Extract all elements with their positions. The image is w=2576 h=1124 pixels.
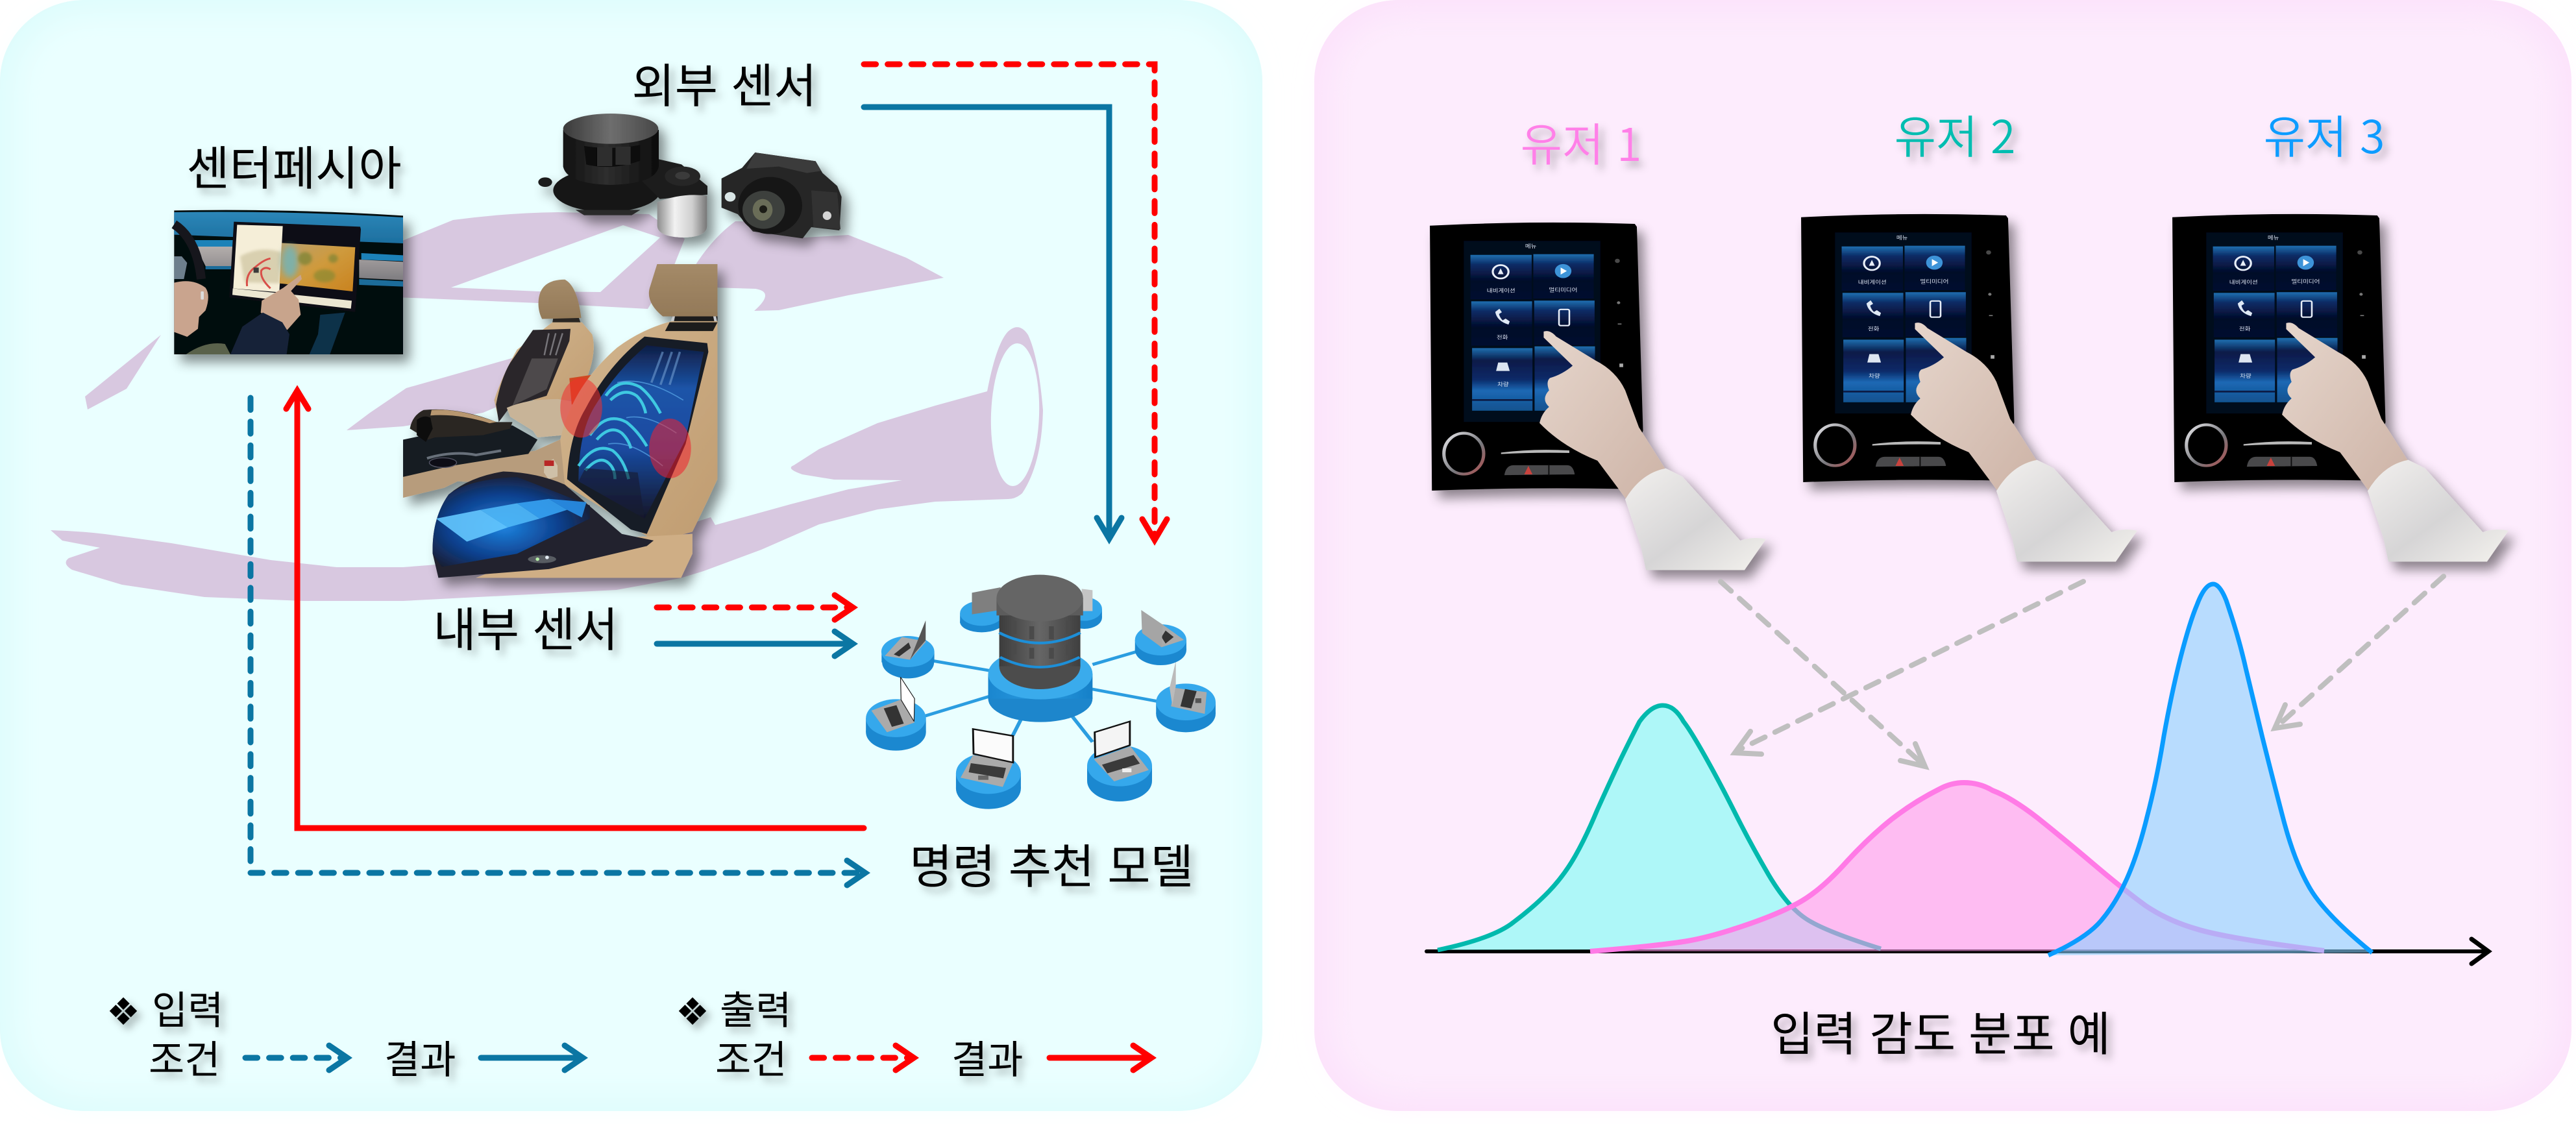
curve: user 3 distribution	[2048, 584, 2372, 955]
heading: user 1: 유저 1	[1521, 109, 1641, 175]
legend heading: output	[676, 989, 791, 1034]
heading: user 2: 유저 2	[1895, 101, 2015, 167]
legend arrow: output result	[1049, 1045, 1151, 1070]
illustration: user 1 touching head unit: 내비게이션	[1487, 287, 1515, 294]
illustration: user 3 touching head unit: 메뉴	[2268, 235, 2279, 241]
illustration: user 1 touching head unit: 전화	[1497, 334, 1508, 340]
chart: input sensitivity distributions	[1427, 584, 2488, 964]
legend label: input result: 결과	[384, 1038, 456, 1082]
arrow: user 2 to green distribution	[1735, 581, 2083, 754]
illustration: user 2 touching head unit: 전화	[1868, 326, 1879, 332]
heading: command recommendation model: 명령 추천 모델	[909, 842, 1194, 894]
outline: user 2 distribution	[1438, 705, 1881, 950]
arrow: user 3 to blue distribution	[2275, 576, 2444, 728]
photo: center fascia touchscreen	[174, 210, 403, 354]
legend label: input condition: 조건	[149, 1038, 220, 1082]
outline: user 3 distribution	[2048, 584, 2372, 955]
axis	[1427, 939, 2488, 964]
arrow: center fascia input to model (blue dashed)	[251, 398, 865, 885]
node: left upper	[881, 620, 935, 678]
illustration: user 3 touching head unit: 멀티미디어	[2291, 278, 2320, 284]
legend label: output condition: 조건	[715, 1038, 787, 1082]
arrow: model output to center fascia (red solid)	[286, 391, 864, 828]
legend heading: output: ❖	[676, 990, 709, 1034]
legend label: output result: 결과	[951, 1038, 1023, 1082]
arrow: internal sensor condition (red dashed)	[657, 595, 853, 620]
photo: lidar sensor	[538, 114, 842, 238]
illustration: user 1 touching head unit	[1430, 223, 1766, 570]
outline: user 1 distribution	[1590, 783, 2324, 951]
illustration: user 1 touching head unit: 차량	[1497, 381, 1509, 387]
legend heading: input: 입력	[152, 989, 223, 1032]
caption: input sensitivity distribution example: 입력 감도 분포 예	[1771, 1009, 2111, 1061]
illustration: user 1 touching head unit: 멀티미디어	[1549, 286, 1577, 293]
node: right upper	[1135, 610, 1186, 665]
legend arrow: output condition	[812, 1045, 914, 1070]
illustration: user 3 touching head unit: 내비게이션	[2229, 279, 2258, 286]
illustration: user 2 touching head unit: 차량	[1869, 373, 1880, 379]
legend arrow: input condition	[245, 1045, 347, 1070]
illustration: user 3 touching head unit	[2172, 214, 2509, 561]
curve: user 1 distribution	[1590, 783, 2324, 951]
illustration: user 1 touching head unit: 메뉴	[1525, 243, 1536, 249]
seat: console and rear seat	[403, 437, 572, 498]
heading: center fascia: 센터페시아	[186, 143, 402, 195]
legend arrow: input result	[481, 1045, 583, 1070]
legend heading: input: ❖	[106, 990, 140, 1034]
illustration: user 2 touching head unit: 메뉴	[1896, 235, 1907, 241]
illustration: user 3 touching head unit: 차량	[2240, 373, 2251, 379]
heading: external sensors: 외부 센서	[632, 61, 816, 113]
heading: internal sensors: 내부 센서	[434, 605, 618, 657]
panel: per-user input sensitivity	[1314, 0, 2571, 1111]
node: left lower	[866, 677, 926, 751]
hub base	[988, 648, 1092, 722]
legend: input	[106, 989, 583, 1082]
illustration: user 2 touching head unit	[1801, 214, 2137, 561]
illustration: user 2 touching head unit: 멀티미디어	[1920, 278, 1948, 284]
arrow: internal sensor result (blue solid)	[657, 631, 853, 656]
rear nodes	[960, 587, 1102, 632]
database cylinder	[996, 575, 1083, 689]
curve: user 2 distribution	[1438, 705, 1881, 950]
legend heading: input	[106, 989, 223, 1034]
node: right lower	[1156, 661, 1216, 732]
panel: in-vehicle sensors and recommendation model	[0, 0, 1262, 1111]
photo: ventilated car seat	[403, 264, 717, 578]
node: front left	[956, 729, 1021, 809]
illustration: user 3 touching head unit: 전화	[2239, 326, 2250, 332]
legend heading: output: 출력	[720, 989, 791, 1032]
illustration: user 2 touching head unit: 내비게이션	[1858, 279, 1887, 286]
arrow: external sensor condition (red dashed)	[864, 64, 1167, 540]
seat: cushion base	[476, 534, 693, 578]
arrow: external sensor result (blue solid)	[864, 107, 1122, 539]
car silhouette background	[51, 212, 1043, 601]
seat: main backrest	[672, 312, 717, 323]
network icon: recommendation model	[866, 575, 1216, 809]
heading: user 3: 유저 3	[2264, 101, 2385, 167]
arrow: user 1 to pink distribution	[1721, 581, 1925, 766]
legend: output	[676, 989, 1151, 1082]
node: front right	[1087, 722, 1152, 801]
